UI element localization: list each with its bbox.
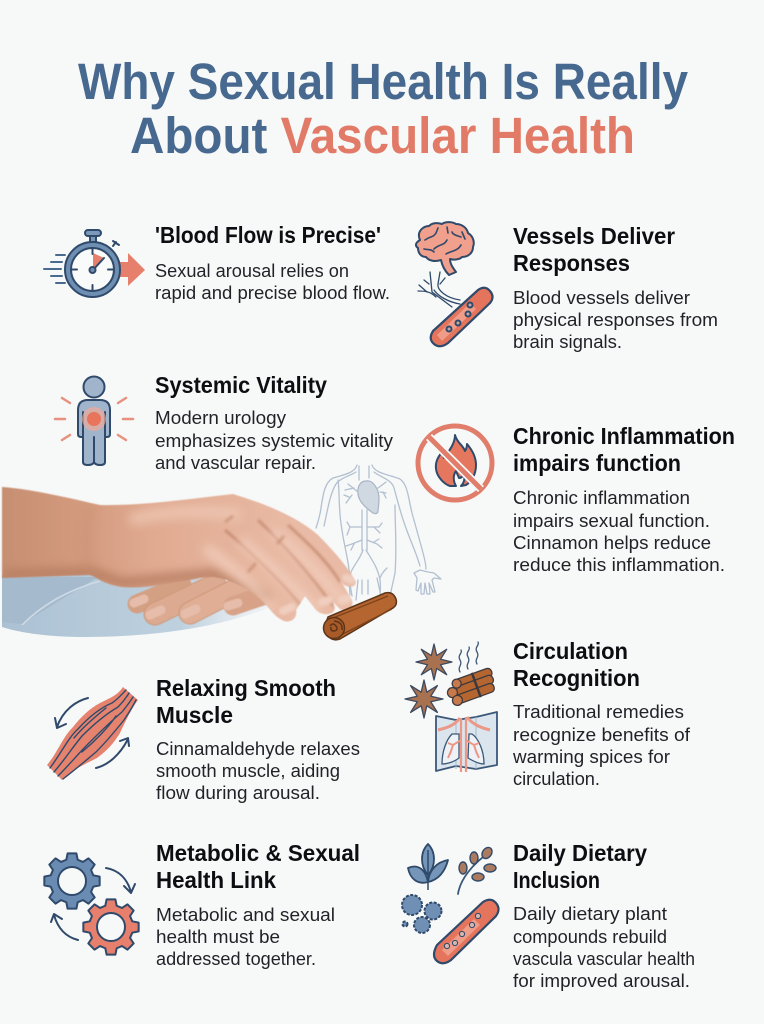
icon: star anise, cinnamon bundle and lung map: [405, 642, 499, 772]
title: [78, 53, 689, 164]
illustration: vascular body diagram: [316, 465, 441, 600]
body text: reduce this inflammation.: [513, 555, 725, 575]
body text: Cinnamon helps reduce: [513, 533, 711, 553]
body text: warming spices for: [512, 747, 670, 767]
body text: impairs sexual function.: [513, 511, 710, 531]
panel: systemic vitality: [55, 372, 393, 473]
panel: chronic inflammation: [418, 423, 735, 575]
heading: [513, 423, 735, 476]
body text: for improved arousal.: [513, 971, 690, 991]
heading: Vessels Deliver: [513, 223, 675, 249]
heading: Relaxing Smooth: [156, 675, 336, 701]
heading: impairs function: [513, 450, 681, 476]
icon: cinnamon stick: [324, 593, 396, 640]
panel: circulation recognition: [405, 638, 691, 789]
heading: Recognition: [513, 665, 640, 691]
panel: relaxing smooth muscle: [47, 675, 360, 803]
body text: [513, 488, 725, 575]
body text: [513, 904, 695, 991]
panel: blood flow is precise: [44, 222, 390, 303]
title: About Vascular Health: [130, 107, 635, 164]
illustration: hands on sheet: [2, 487, 356, 637]
body text: recognize benefits of: [513, 725, 691, 745]
icon: brain and blood vessel: [416, 222, 492, 346]
body text: [513, 288, 718, 352]
body text: Blood vessels deliver: [513, 288, 690, 308]
body text: flow during arousal.: [156, 783, 320, 803]
heading: Systemic Vitality: [155, 372, 327, 398]
panel: metabolic and sexual health link: [44, 840, 360, 969]
heading: Muscle: [156, 702, 233, 728]
body text: [155, 408, 393, 473]
body text: [156, 739, 360, 803]
body text: Traditional remedies: [513, 702, 684, 722]
body text: rapid and precise blood flow.: [155, 283, 390, 303]
icon: interlocking gears with arrows: [44, 853, 139, 955]
panel: daily dietary inclusion: [402, 840, 695, 991]
icon: crossed out flame: [418, 426, 492, 500]
body text: Daily dietary plant: [513, 904, 667, 924]
body text: Chronic inflammation: [513, 488, 690, 508]
title: Why Sexual Health Is Really: [78, 53, 689, 110]
body text: [156, 905, 335, 969]
body text: emphasizes systemic vitality: [155, 431, 393, 451]
body text: Modern urology: [155, 408, 286, 428]
body text: and vascular repair.: [155, 453, 316, 473]
body text: smooth muscle, aiding: [156, 761, 340, 781]
body text: [512, 702, 691, 789]
icon: muscle with arrows: [47, 687, 138, 780]
lower hand fingers: [134, 585, 280, 615]
body text: Cinnamaldehyde relaxes: [156, 739, 360, 759]
body text: [155, 261, 390, 303]
heading: [513, 638, 640, 691]
body text: circulation.: [513, 769, 600, 789]
body text: Metabolic and sexual: [156, 905, 335, 925]
body text: brain signals.: [513, 332, 622, 352]
heading: Health Link: [156, 867, 276, 893]
panel: vessels deliver responses: [416, 222, 718, 352]
body text: addressed together.: [156, 949, 316, 969]
hand shading: [2, 505, 352, 612]
heading: [156, 675, 336, 728]
body text: health must be: [156, 927, 280, 947]
heading: [513, 840, 647, 893]
heading: Circulation: [513, 638, 628, 664]
icon: stopwatch with arrow: [44, 230, 145, 297]
heading: Metabolic & Sexual: [156, 840, 360, 866]
icon: person with glowing core: [55, 376, 133, 465]
heading: Inclusion: [513, 867, 600, 893]
heading: [513, 223, 675, 276]
body text: Sexual arousal relies on: [155, 261, 349, 281]
body text: physical responses from: [513, 310, 718, 330]
body text: vascula vascular health: [513, 949, 695, 969]
heading: Responses: [513, 250, 630, 276]
heading: 'Blood Flow is Precise': [155, 222, 381, 248]
heading: Chronic Inflammation: [513, 423, 735, 449]
sheet: [2, 574, 300, 637]
heading: Daily Dietary: [513, 840, 647, 866]
upper hand and wrist: [2, 487, 356, 622]
heading: [156, 840, 360, 893]
icon: leaves, berries, compounds and vessel: [402, 844, 498, 963]
body text: compounds rebuild: [513, 927, 667, 947]
